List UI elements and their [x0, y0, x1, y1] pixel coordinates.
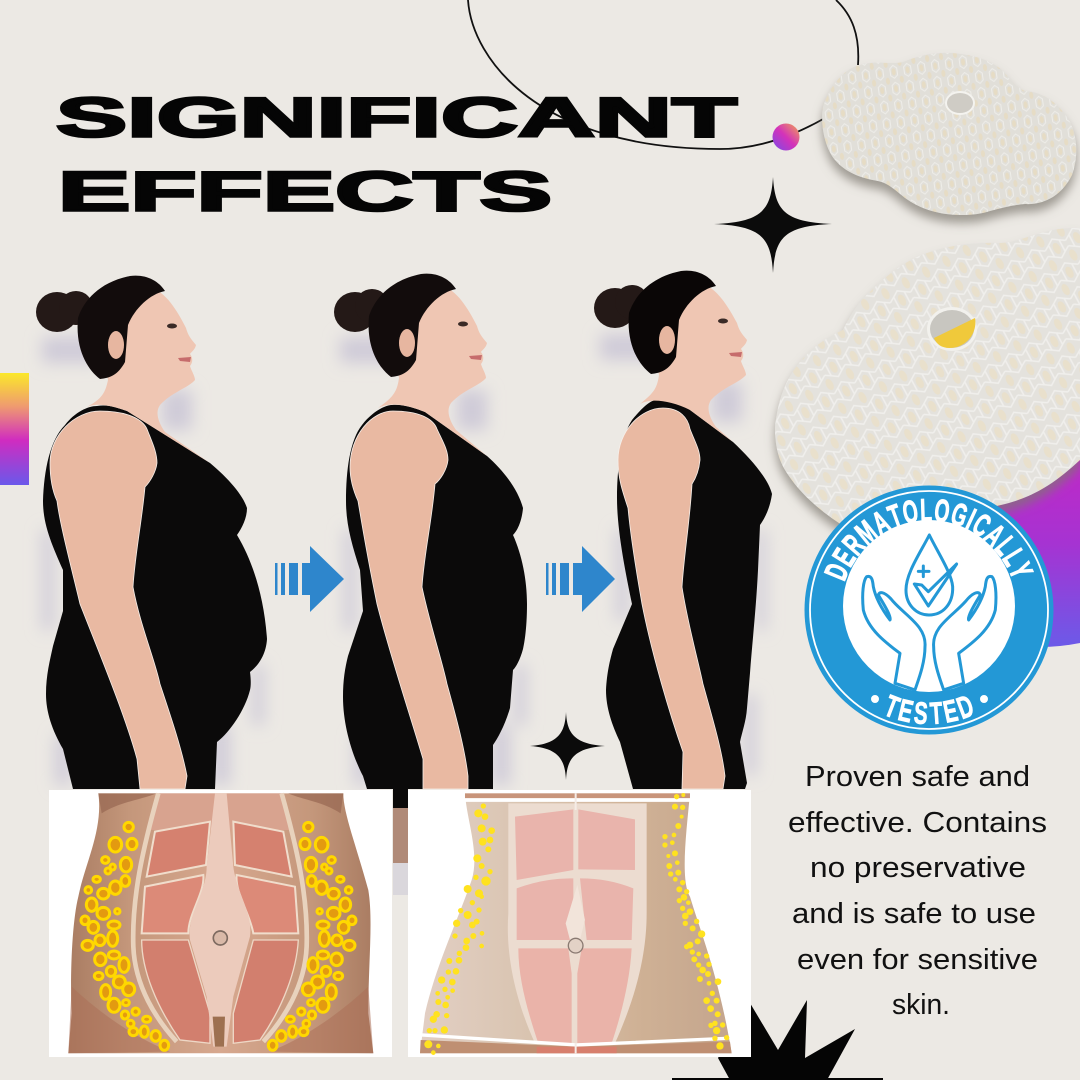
badge text arc: L — [995, 543, 1032, 572]
text block: safety claim: skin. — [892, 989, 950, 1021]
arrow one — [275, 546, 344, 612]
arrow two — [546, 546, 615, 612]
patch: large — [775, 228, 1080, 530]
badge text tested — [871, 688, 988, 731]
text block: safety claim: and is safe to use — [792, 898, 1036, 930]
badge text arc: I — [961, 502, 981, 537]
gradient orb — [772, 124, 800, 150]
sparkle star top — [714, 177, 832, 273]
illustration — [420, 793, 732, 1053]
badge text arc: Y — [1002, 558, 1040, 584]
title: SIGNIFICANT — [56, 86, 737, 148]
badge text tested: T — [880, 688, 904, 725]
neck and chest skin — [85, 288, 210, 463]
body tank top and shorts — [43, 405, 267, 789]
head — [334, 274, 482, 377]
text block: safety claim: Proven safe and — [805, 761, 1030, 793]
badge text tested: E — [895, 692, 916, 730]
decorative gradient bar — [0, 373, 29, 485]
text block: safety claim: no preservative — [810, 852, 1026, 884]
badge text arc — [817, 492, 1040, 585]
text block: safety claim: effective. Contains — [788, 807, 1047, 839]
badge: dermatologically tested — [804, 486, 1054, 734]
body tank top and shorts — [606, 399, 772, 789]
patch: small — [822, 53, 1076, 215]
arm — [50, 411, 187, 789]
figure two arm tail between panels — [393, 788, 408, 895]
sparkle star middle — [530, 712, 605, 780]
decorative curve line — [468, 0, 858, 149]
badge text arc: T — [883, 497, 907, 535]
badge text arc: G — [947, 495, 972, 534]
badge text arc: O — [900, 493, 921, 531]
arm — [350, 411, 468, 789]
neck and chest skin — [378, 286, 487, 456]
figure: before — [36, 276, 267, 789]
badge text arc: C — [966, 506, 997, 544]
figure shadows — [42, 334, 766, 785]
badge text arc: O — [932, 492, 952, 530]
head — [36, 276, 191, 379]
figure: during — [334, 274, 527, 789]
illustration — [68, 793, 373, 1053]
badge text tested: T — [929, 695, 944, 731]
text block: safety claim — [788, 761, 1047, 1021]
body tank top and shorts — [343, 405, 527, 789]
title — [56, 86, 737, 222]
title: EFFECTS — [58, 160, 552, 222]
panel: abdomen after — [408, 790, 751, 1057]
panel: abdomen before — [49, 790, 392, 1057]
badge text arc: L — [988, 530, 1023, 562]
badge text arc: D — [817, 558, 856, 585]
badge text arc: A — [978, 517, 1012, 553]
neck and chest skin — [640, 284, 747, 442]
starburst bottom — [672, 1000, 883, 1080]
icon: hands holding drop — [863, 535, 996, 690]
fat cells — [81, 822, 356, 1050]
figure: after — [594, 271, 772, 789]
badge text tested: D — [952, 688, 978, 726]
badge text arc: R — [835, 527, 872, 562]
badge text arc: A — [866, 503, 896, 542]
badge text tested: E — [940, 692, 961, 730]
fat dots — [424, 793, 729, 1055]
badge text arc: L — [920, 492, 932, 528]
arm — [618, 408, 725, 789]
badge text arc: E — [825, 542, 863, 572]
badge text arc: M — [848, 513, 884, 552]
text block: safety claim: even for sensitive — [797, 944, 1038, 976]
purple gradient blob — [980, 440, 1080, 647]
head — [594, 271, 742, 374]
badge text tested: S — [913, 695, 929, 731]
